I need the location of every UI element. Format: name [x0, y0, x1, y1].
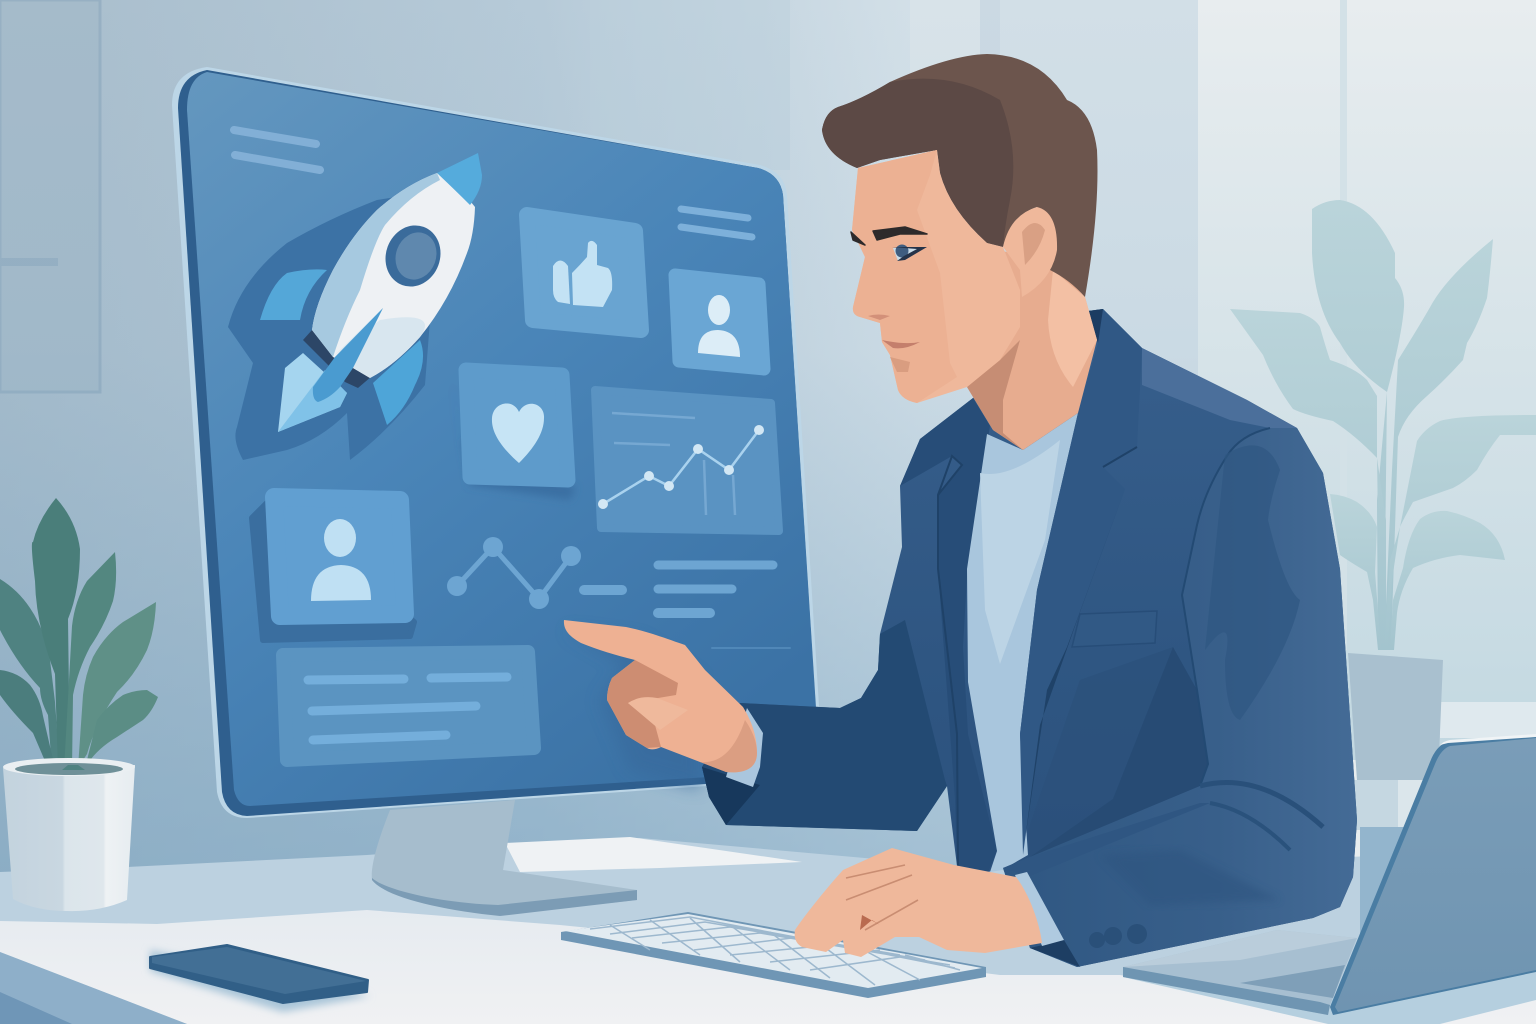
- ear: [1003, 207, 1057, 297]
- shirt: [967, 413, 1078, 872]
- rocket with shadow: [228, 153, 482, 460]
- hair: [822, 54, 1098, 297]
- eyebrow: [851, 227, 927, 245]
- near sleeve shade: [702, 620, 947, 831]
- person: [564, 54, 1357, 967]
- pot: [3, 758, 135, 911]
- profile card small: [675, 275, 764, 369]
- monitor stand: [372, 800, 637, 916]
- desk: [0, 780, 1536, 1024]
- left plant: [0, 498, 158, 911]
- right lapel: [1020, 309, 1142, 855]
- laptop: [1123, 734, 1536, 1015]
- top left text lines: [234, 130, 320, 170]
- sleeve buttons: [1089, 924, 1147, 948]
- monitor: [172, 67, 823, 818]
- neck: [967, 250, 1097, 450]
- background plant: [1230, 200, 1536, 650]
- large profile card: [252, 497, 414, 640]
- torso jacket: [702, 309, 1357, 967]
- line chart on screen: [447, 537, 581, 609]
- heart card: [452, 370, 576, 500]
- left front shade: [900, 398, 997, 872]
- thumbs up card: [527, 215, 641, 330]
- background plant pot: [1348, 653, 1443, 780]
- eye: [892, 244, 927, 261]
- shoulder highlight: [1142, 348, 1297, 428]
- face: [852, 150, 1020, 403]
- bottom text card: [283, 652, 534, 760]
- typing hand: [795, 848, 1064, 957]
- bezel: [172, 67, 823, 818]
- leaves: [0, 498, 158, 770]
- jacket pocket: [1072, 611, 1157, 647]
- right text lines: [584, 565, 790, 648]
- chart card: [595, 390, 779, 531]
- top right text lines: [681, 209, 752, 237]
- pointing hand: [564, 620, 763, 787]
- far sleeve: [1003, 428, 1357, 967]
- finger shadow on screen: [565, 630, 700, 790]
- keyboard: [561, 912, 986, 998]
- phone: [150, 945, 370, 1012]
- mouth: [882, 340, 920, 348]
